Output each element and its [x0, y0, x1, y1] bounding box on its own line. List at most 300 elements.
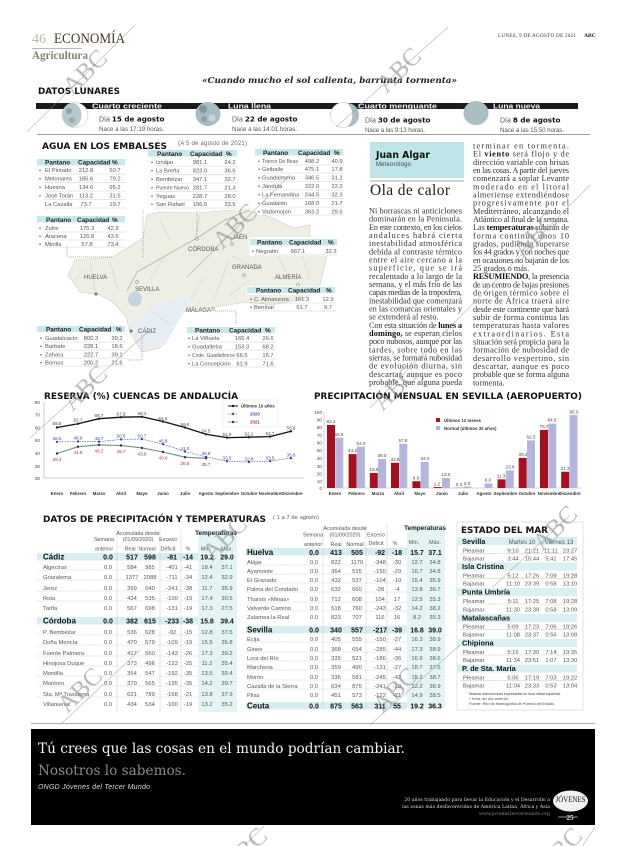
- bar chart: 32.8: [391, 457, 400, 462]
- table: Cádiz and Córdoba: 32.9: [221, 575, 233, 581]
- table: Málaga reservoirs: •: [188, 362, 190, 368]
- tide table: 11:11: [544, 548, 558, 554]
- table: Cádiz reservoirs: 200.2: [84, 360, 98, 366]
- table: Huelva, Sevilla and Ceuta: 0.0: [310, 637, 318, 643]
- page number: 46: [32, 32, 46, 47]
- date line: LUNES, 9 DE AGOSTO DE 2021: [498, 33, 576, 39]
- table: Huelva, Sevilla and Ceuta: 0.0: [310, 665, 318, 671]
- table: Cádiz reservoirs: 800.3: [84, 336, 98, 342]
- phase: cuarto menguante: Nace a las 9:13 horas.: [365, 127, 425, 134]
- table: Málaga reservoirs: Pantano: [195, 328, 220, 334]
- article text column 2: descartar, aunque es poco: [473, 362, 569, 371]
- table: Cádiz and Córdoba: 698: [145, 606, 155, 612]
- bar chart: 75.7: [540, 424, 549, 429]
- table: Granada reservoir: Pantano: [257, 240, 282, 246]
- article text column 1: debida al contraste térmico: [369, 247, 462, 256]
- table: Huelva, Sevilla and Ceuta: 16.8: [410, 628, 424, 634]
- table: Cádiz and Córdoba: 985: [145, 565, 155, 571]
- table: Málaga reservoirs: 26.6: [262, 336, 274, 342]
- table: Huelva, Sevilla and Ceuta: 505: [351, 550, 363, 557]
- table: Huelva, Sevilla and Ceuta: 37.1: [428, 550, 442, 557]
- table: Cádiz and Córdoba: 11.2: [202, 661, 212, 667]
- tide table: 7:06: [545, 624, 557, 630]
- table: Huelva, Sevilla and Ceuta: [246, 525, 446, 710]
- table: Cádiz and Córdoba: 39.4: [221, 671, 233, 677]
- table: Jaén reservoirs: •: [258, 176, 260, 182]
- table: Huelva, Sevilla and Ceuta: 0.0: [310, 647, 318, 653]
- table: Cádiz and Córdoba: Fuente Palmera: [43, 651, 85, 657]
- table: Cádiz and Córdoba: Jerez: [43, 586, 57, 592]
- line chart: Noviembre: [259, 491, 282, 496]
- table: Cádiz and Córdoba: 1377: [126, 575, 138, 581]
- phase: cuarto creciente: [92, 104, 165, 133]
- table: Huelva, Sevilla and Ceuta: 359: [331, 665, 341, 671]
- table: Cádiz and Córdoba: 30.5: [221, 596, 233, 602]
- article text column 2: de un centro de bajas presiones: [473, 280, 569, 289]
- tide table: 11:04: [506, 684, 521, 690]
- table: Huelva, Sevilla and Ceuta: 0.0: [310, 656, 318, 662]
- table: Huelva, Sevilla and Ceuta: 38.2: [429, 606, 441, 612]
- table: Cádiz and Córdoba: 373: [127, 661, 137, 667]
- table: Córdoba reservoirs west: •: [39, 185, 41, 191]
- table: Huelva, Sevilla and Ceuta: 490: [352, 665, 362, 671]
- table: Cádiz and Córdoba: -35: [184, 671, 192, 677]
- table: Huelva, Sevilla and Ceuta: 336: [331, 675, 341, 681]
- table: Córdoba reservoirs centre: 981.1: [193, 160, 207, 166]
- table: Cádiz and Córdoba: -19: [184, 606, 192, 612]
- table: Huelva, Sevilla and Ceuta: 875: [352, 684, 362, 690]
- article text column 1: poco nubosos, aunque por las: [369, 337, 462, 346]
- table: Cádiz and Córdoba: Rota: [43, 596, 56, 602]
- table: Huelva, Sevilla and Ceuta: 660: [352, 587, 362, 593]
- article heading: Ola de calor: [370, 182, 451, 199]
- ad signature: ONGD Jóvenes del Tercer Mundo: [38, 784, 150, 791]
- watermarks: ABC: [58, 45, 113, 100]
- bar chart: 6.0: [485, 478, 492, 482]
- article text column 1: semana, y el más frío de las: [369, 280, 462, 289]
- tide table: 5:16: [507, 650, 519, 656]
- table: Cádiz and Córdoba: anterior: [95, 546, 113, 552]
- table: Jaén reservoirs: Giribaile: [262, 167, 283, 173]
- brand: ABC: [584, 33, 596, 39]
- table: Cádiz and Córdoba: -195: [166, 681, 178, 687]
- table: Cádiz and Córdoba: 17.4: [201, 596, 213, 602]
- table: Córdoba reservoirs centre: Iznájar: [156, 160, 173, 166]
- table: Cádiz and Córdoba: -19: [184, 596, 192, 602]
- table: Cádiz and Córdoba: [37, 530, 237, 712]
- line chart: Abril: [116, 491, 126, 496]
- tide table: 23:51: [525, 658, 539, 664]
- line chart: 20: [35, 476, 40, 481]
- table: Huelva reservoirs: Zufre: [45, 226, 59, 232]
- article text column 1: [369, 206, 463, 387]
- tide table: 1:07: [545, 658, 557, 664]
- table: Córdoba reservoirs west: [37, 158, 127, 210]
- table: Cádiz reservoirs: •: [40, 336, 42, 342]
- bar chart: 2.0: [464, 481, 471, 486]
- table: Jaén reservoirs: Guadalmena: [262, 176, 296, 182]
- table: Cádiz reservoirs: 39.1: [111, 352, 123, 358]
- map of Andalucía: [67, 205, 327, 360]
- line chart: 33.5: [266, 456, 275, 460]
- table: Cádiz reservoirs: 222.7: [84, 352, 98, 358]
- table: Cádiz and Córdoba: Hinojosa Duque: [43, 661, 84, 667]
- table: Huelva, Sevilla and Ceuta: 0.0: [310, 684, 318, 690]
- table: Huelva, Sevilla and Ceuta: -29: [393, 569, 401, 575]
- table: Huelva, Sevilla and Ceuta: -186: [374, 656, 386, 662]
- table: Huelva, Sevilla and Ceuta: 654: [352, 647, 363, 653]
- table: Huelva, Sevilla and Ceuta: Palma del Condado: [247, 587, 298, 593]
- tide table: 23:39: [525, 582, 539, 588]
- table: Huelva, Sevilla and Ceuta: 340: [330, 628, 342, 634]
- page header: [32, 30, 596, 62]
- table: Cádiz and Córdoba: Córdoba: [43, 616, 76, 626]
- table: Cádiz and Córdoba: 579: [145, 640, 155, 646]
- table: Cádiz and Córdoba: -21: [184, 692, 192, 698]
- table: Jaén reservoirs: Jándula: [262, 184, 283, 190]
- table: Córdoba reservoirs west: 113.2: [79, 194, 93, 200]
- bar chart: 38.0: [378, 453, 387, 458]
- table: Huelva, Sevilla and Ceuta: 17: [394, 597, 400, 603]
- table: Huelva, Sevilla and Ceuta: 451: [331, 693, 341, 699]
- tide table: Bajamar: [463, 632, 485, 638]
- table: Huelva, Sevilla and Ceuta: 0.0: [310, 587, 318, 593]
- table: Huelva, Sevilla and Ceuta: 563: [351, 704, 363, 710]
- table: Huelva, Sevilla and Ceuta: 15.7: [410, 550, 424, 557]
- article text column 2: desde este continente que hará: [473, 305, 569, 314]
- table: Granada reservoir: [249, 237, 341, 256]
- moon: luna llena: [196, 102, 220, 126]
- panel: monthly rainfall chart: [314, 390, 582, 496]
- table: Huelva, Sevilla and Ceuta: 16.7: [411, 569, 423, 575]
- line chart: 66.7: [95, 413, 104, 418]
- watermarks: ABC: [198, 511, 253, 566]
- table: Jaén reservoirs: La Fernandina: [262, 192, 300, 198]
- line chart: 52.2: [245, 432, 254, 436]
- table: Huelva, Sevilla and Ceuta: 14.9: [411, 693, 423, 699]
- article text column 1: domingo, se esperan cielos: [369, 329, 462, 338]
- table: Córdoba reservoirs centre: Capacidad: [190, 151, 222, 158]
- line chart: 32.8: [245, 456, 254, 462]
- table: Huelva, Sevilla and Ceuta: -18: [392, 550, 402, 557]
- article text column 1: superficie, que se irá: [369, 264, 462, 273]
- ad tagline: [402, 796, 550, 817]
- table: Cádiz reservoirs: Guadalcacín: [45, 336, 78, 342]
- table: Huelva, Sevilla and Ceuta: 8.2: [413, 615, 421, 621]
- phase: luna llena: Día 22 de agosto: [232, 114, 298, 124]
- table: Cádiz and Córdoba: (01/09/2020): [123, 537, 153, 543]
- table: Cádiz and Córdoba: -38: [184, 586, 192, 592]
- table: Huelva reservoirs: Pantano: [46, 217, 71, 224]
- table: Huelva, Sevilla and Ceuta: 17.3: [411, 647, 423, 653]
- table: Cádiz and Córdoba: 565: [145, 681, 155, 687]
- table: Huelva, Sevilla and Ceuta: -36: [393, 656, 401, 662]
- table: Huelva, Sevilla and Ceuta: Exceso: [367, 532, 385, 538]
- table: Almería reservoirs: •: [250, 305, 252, 311]
- table: Huelva, Sevilla and Ceuta: -27: [393, 637, 401, 643]
- bar chart: 23.0: [506, 464, 515, 470]
- bar chart: Diciembre: [559, 491, 581, 496]
- table: Huelva, Sevilla and Ceuta: 608: [352, 597, 362, 603]
- article text column 2: comenzará a soplar Levante: [473, 174, 569, 183]
- table: Huelva, Sevilla and Ceuta: 0.0: [310, 615, 318, 621]
- table: Granada reservoir: 567.1: [291, 249, 305, 255]
- table: Jaén reservoirs: •: [258, 159, 260, 165]
- bar chart: 82.2: [327, 419, 336, 424]
- table: Cádiz and Córdoba: 0.0: [104, 630, 112, 636]
- panel: state of the sea: [457, 522, 583, 710]
- table: Huelva, Sevilla and Ceuta: Real: [330, 542, 342, 548]
- table: Córdoba reservoirs west: 134.6: [79, 185, 93, 191]
- line chart: 68.2: [138, 411, 147, 416]
- line chart: 46.8: [159, 438, 168, 444]
- table: Huelva, Sevilla and Ceuta: 0.0: [309, 704, 319, 710]
- phase: cuarto creciente: Día 15 de agosto: [99, 114, 165, 124]
- phase: luna llena: Nace a las 14:01 horas.: [232, 126, 297, 133]
- bar chart: 57.8: [399, 438, 408, 443]
- bar chart: 50: [317, 448, 322, 453]
- article text column 1: capas medias de la troposfera,: [369, 288, 462, 297]
- table: Córdoba reservoirs west: 185.6: [79, 176, 93, 182]
- table: Almería reservoirs: Capacidad: [288, 288, 320, 294]
- moon: cuarto creciente: [62, 102, 88, 128]
- table: Cádiz and Córdoba: 534: [145, 702, 156, 708]
- table: Cádiz and Córdoba: Real: [124, 546, 136, 552]
- table: Cádiz and Córdoba: -41: [184, 565, 192, 571]
- table: Córdoba reservoirs west: Pantano: [45, 160, 70, 166]
- bar chart: 90: [317, 418, 322, 422]
- table: Granada reservoir: Negratín: [256, 249, 278, 255]
- tide table: Pleamar: [463, 574, 485, 580]
- table: Almería reservoirs: 61.7: [296, 305, 308, 311]
- table: Huelva, Sevilla and Ceuta: 0.0: [310, 675, 318, 681]
- table: Cádiz and Córdoba: 35.8: [221, 640, 233, 646]
- tide table: 7:09: [545, 574, 557, 580]
- table: Huelva, Sevilla and Ceuta: 15.2: [411, 675, 423, 681]
- table: Cádiz and Córdoba: -233: [165, 618, 179, 626]
- table: Córdoba reservoirs west: •: [39, 194, 41, 200]
- table: Huelva, Sevilla and Ceuta: -150: [374, 569, 386, 575]
- table: Cádiz and Córdoba: 17.3: [201, 651, 213, 657]
- table: Cádiz and Córdoba: 0.0: [104, 681, 112, 687]
- heading: DATOS DE PRECIPITACIÓN Y TEMPERATURAS: [43, 513, 266, 525]
- table: Cádiz and Córdoba: Máx.: [221, 546, 233, 552]
- table: Huelva, Sevilla and Ceuta: 34.8: [429, 560, 441, 566]
- bar chart: [314, 410, 582, 496]
- table: Córdoba reservoirs centre: 24.2: [224, 160, 236, 166]
- table: Córdoba reservoirs centre: 156.5: [193, 202, 207, 208]
- table: Cádiz and Córdoba: -711: [166, 575, 178, 581]
- line chart: 36.8: [202, 451, 211, 456]
- article text column 1: dominarán en la Península.: [369, 215, 462, 224]
- chart legend: Normal (últimos 30 años): [444, 426, 497, 431]
- table: Huelva reservoirs: 43.5: [107, 234, 119, 240]
- table: Almería reservoirs: [246, 286, 336, 311]
- table: Cádiz and Córdoba: 547: [145, 671, 155, 677]
- table: Cádiz reservoirs: %: [116, 326, 122, 334]
- table: Córdoba reservoirs west: José Torán: [45, 194, 73, 200]
- table: Huelva, Sevilla and Ceuta: 19.2: [410, 704, 424, 710]
- table: Cádiz and Córdoba: 18.4: [201, 565, 213, 571]
- table: Cádiz reservoirs: Capacidad: [79, 326, 111, 334]
- article text column 1: inestabilidad que comenzará: [369, 296, 462, 305]
- table: Cádiz and Córdoba: 517: [126, 554, 138, 562]
- sea table notes: Mareas astronómicas expresadas en hora oficial española.: [469, 691, 561, 696]
- watermarks: ABC: [53, 663, 108, 718]
- line chart: 30: [35, 464, 40, 469]
- article text column 2: desarrollo vespertino, sin: [473, 354, 570, 363]
- table: Málaga reservoirs: 61.9: [236, 362, 248, 368]
- table: Córdoba reservoirs centre: %: [226, 151, 232, 158]
- bar chart: 20: [317, 472, 322, 476]
- table: Jaén reservoirs: 22.2: [331, 184, 343, 190]
- table: Córdoba reservoirs centre: •: [151, 186, 153, 192]
- table: Huelva reservoirs: •: [39, 226, 41, 232]
- article text column 2: dirección variable con brisas: [473, 158, 569, 167]
- table: Cádiz and Córdoba: -100: [166, 596, 178, 602]
- table: Huelva, Sevilla and Ceuta: Mín.: [409, 540, 419, 546]
- table: Jaén reservoirs: 168.0: [305, 201, 319, 207]
- tide table: 23:33: [525, 684, 539, 690]
- line chart: 56.8: [287, 426, 296, 430]
- table: Córdoba reservoirs west: Huesna: [45, 185, 66, 191]
- table: Jaén reservoirs: 322.0: [305, 184, 319, 190]
- table: Jaén reservoirs: Guadalén: [262, 201, 287, 207]
- line chart: 52.7: [266, 431, 275, 436]
- table: Cádiz and Córdoba: -123: [166, 661, 178, 667]
- panel: basin reserve chart: [35, 390, 304, 496]
- table: Cádiz and Córdoba: Doña Mencía: [43, 640, 78, 646]
- tide table: 21:21: [525, 548, 539, 554]
- table: Cádiz and Córdoba: -168: [166, 692, 178, 698]
- tide table: Bajamar: [463, 582, 485, 588]
- table: Cádiz and Córdoba: 29.0: [220, 554, 234, 562]
- tide table: 13:30: [563, 658, 577, 664]
- tide table: 13:08: [563, 632, 577, 638]
- table: Huelva, Sevilla and Ceuta: 555: [352, 637, 362, 643]
- table: Cádiz and Córdoba: -14: [183, 554, 193, 562]
- table: Cádiz and Córdoba: 470: [127, 640, 137, 646]
- table: Huelva, Sevilla and Ceuta: 413: [330, 550, 342, 557]
- table: Huelva, Sevilla and Ceuta: 0.0: [309, 550, 319, 557]
- table: Huelva, Sevilla and Ceuta: -104: [374, 578, 387, 584]
- table: Cádiz reservoirs: 228.1: [84, 344, 98, 350]
- bar chart: 39.2: [519, 452, 528, 457]
- table: Jaén reservoirs: 29.5: [331, 210, 343, 216]
- table: Cádiz and Córdoba: 0.0: [103, 618, 113, 626]
- bar chart: 65.6: [335, 432, 344, 437]
- tide table: 13:09: [563, 608, 577, 614]
- table: Huelva, Sevilla and Ceuta: 573: [352, 693, 362, 699]
- bar chart: Febrero: [348, 491, 365, 496]
- table: Almería reservoirs: Benínar: [254, 305, 274, 311]
- line chart: 39.4: [53, 457, 62, 462]
- table: Cádiz and Córdoba: 12.8: [201, 630, 213, 636]
- author box: Juan Algar: [375, 150, 430, 161]
- table: Córdoba reservoirs centre: 228.7: [193, 194, 207, 200]
- table: Jaén reservoirs: •: [258, 201, 260, 207]
- table: Huelva, Sevilla and Ceuta: 35.3: [429, 615, 441, 621]
- article text column 2: formación de nubosidad de: [473, 346, 569, 355]
- table: Huelva, Sevilla and Ceuta: (01/09/2020): [330, 532, 360, 538]
- table: Cádiz and Córdoba: 37.9: [221, 692, 233, 698]
- table: Córdoba reservoirs centre: 21.3: [224, 186, 236, 192]
- line chart: 45.7: [117, 449, 126, 454]
- panel: precipitation and temperature data: [37, 513, 446, 712]
- line chart: 51.9: [223, 432, 232, 437]
- table: Cádiz and Córdoba: 0.0: [104, 586, 112, 592]
- table: Jaén reservoirs: Vadomojón: [262, 210, 291, 216]
- line chart: 60: [35, 426, 40, 430]
- table: Jaén reservoirs: •: [258, 167, 260, 173]
- table: Cádiz and Córdoba: 13.5: [201, 671, 213, 677]
- bar chart: 21.3: [561, 466, 570, 471]
- table: Córdoba reservoirs west: 95.2: [109, 185, 121, 191]
- table: Cádiz and Córdoba: 417: [127, 651, 137, 657]
- table: Jaén reservoirs: •: [258, 192, 260, 198]
- line chart: 80: [35, 400, 40, 405]
- table: Huelva, Sevilla and Ceuta: Déficit: [369, 541, 384, 547]
- table: Córdoba reservoirs west: •: [39, 168, 41, 174]
- table: Jaén reservoirs: %: [334, 150, 340, 157]
- chart legend: 2021: [250, 420, 260, 424]
- table: Cádiz and Córdoba: 560: [145, 651, 155, 657]
- table: Cádiz and Córdoba: 434: [127, 702, 138, 708]
- table: Huelva reservoirs: Capacidad: [77, 217, 109, 224]
- moon: luna nueva: [464, 101, 488, 125]
- table: Huelva, Sevilla and Ceuta: 12.5: [411, 597, 423, 603]
- phase: luna llena: Luna llena: [228, 104, 271, 110]
- line chart: Enero: [51, 491, 64, 496]
- line chart: 64.5: [159, 416, 168, 421]
- table: Cádiz and Córdoba: 39.2: [221, 651, 233, 657]
- table: Huelva reservoirs: 175.3: [80, 226, 94, 232]
- table: Jaén reservoirs: Pantano: [263, 150, 288, 157]
- tide table: Bajamar: [463, 658, 485, 664]
- table: Cádiz reservoirs: •: [40, 352, 42, 358]
- tide table: 5:41: [545, 556, 557, 562]
- table: Cádiz and Córdoba: 11.7: [202, 586, 212, 592]
- tide table: 0:53: [545, 684, 557, 690]
- line chart: 48.7: [95, 436, 104, 441]
- table: Cádiz and Córdoba: -192: [166, 671, 178, 677]
- table: Huelva, Sevilla and Ceuta: 518: [331, 606, 341, 612]
- table: Huelva reservoirs: Aracena: [45, 234, 67, 240]
- line chart: 46.2: [95, 448, 104, 454]
- table: Huelva, Sevilla and Ceuta: Alájar: [247, 560, 262, 566]
- line chart: 33.5: [223, 456, 232, 460]
- bar chart: Enero: [329, 491, 342, 496]
- table: Cádiz reservoirs: Barbate: [45, 344, 65, 350]
- table: Cádiz and Córdoba: 35.4: [221, 661, 233, 667]
- article text column 2: temperaturas hasta valores: [473, 321, 569, 330]
- table: Cádiz and Córdoba: Montilla: [43, 671, 64, 677]
- article text column 2: situación será propicia para la: [473, 338, 569, 346]
- line chart: 70: [35, 412, 40, 418]
- map of Andalucía: SEVILLA: [135, 287, 159, 293]
- article text column 2: subir de forma continua las: [473, 313, 569, 322]
- tide table: 5:06: [507, 676, 519, 682]
- tide table: 19:28: [563, 599, 577, 605]
- table: Cádiz and Córdoba: 584: [127, 565, 138, 571]
- bar chart: 62.0: [527, 434, 536, 440]
- table: Huelva, Sevilla and Ceuta: 0.0: [310, 606, 318, 612]
- table: Huelva, Sevilla and Ceuta: 55: [393, 704, 401, 710]
- tide table: 11:30: [506, 608, 520, 614]
- bar chart: 100: [314, 410, 322, 415]
- table: Cádiz and Córdoba: 370: [127, 681, 137, 687]
- line chart: 50.7: [138, 434, 147, 438]
